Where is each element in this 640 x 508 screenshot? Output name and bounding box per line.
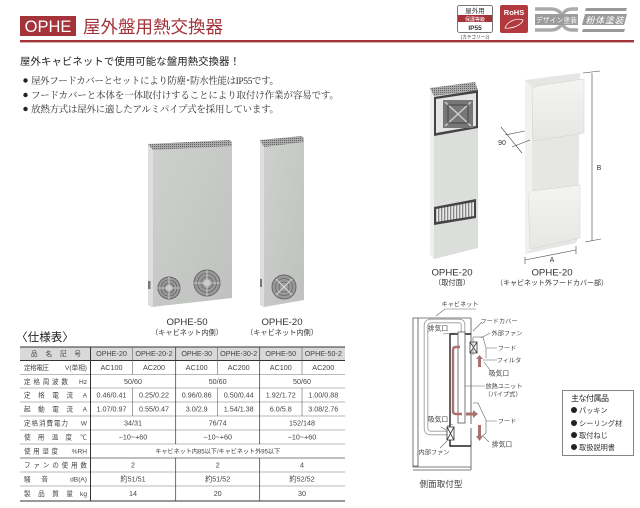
diagram labels — [419, 300, 523, 489]
header row: OPHE-50-2 — [305, 349, 342, 358]
heat pipe unit — [458, 332, 465, 423]
table data: 20 — [214, 489, 222, 498]
table data: 4 — [300, 460, 304, 470]
table heading: 〈仕様表〉 — [16, 330, 74, 344]
badge: RoHS: RoHS — [504, 8, 524, 17]
dimension labels: A — [550, 257, 555, 264]
table data: 1.00/0.88 — [308, 390, 338, 400]
caption: OPHE-50 — [151, 317, 223, 337]
upper hood — [532, 79, 584, 141]
table data: −10~+60 — [288, 432, 316, 442]
lower opening with grille — [434, 199, 476, 225]
caption: OPHE-50: OPHE-50 — [166, 317, 208, 328]
table data: AC100 — [186, 363, 208, 372]
accessories box — [562, 390, 634, 456]
badge: RoHS — [500, 5, 528, 33]
bullet 2: フードカバーと本体を一体取付けすることにより取付け作業が容易です。 — [31, 90, 339, 102]
accessories heading: 主な付属品 — [571, 393, 609, 403]
accessory items: 取付ねじ — [579, 431, 608, 440]
header row: 品名記号 — [31, 349, 81, 358]
row labels: A — [83, 406, 88, 414]
unit frame — [450, 334, 471, 446]
caption: OPHE-20 inside: （キャビネット内側） — [246, 328, 318, 337]
table data: 30 — [298, 489, 306, 498]
caption: OPHE-20 inside: OPHE-20 — [261, 317, 303, 328]
cabinet outline — [413, 318, 471, 470]
model tag: OPHE — [25, 18, 71, 36]
row labels: dB(A) — [70, 476, 87, 484]
internal air duct — [426, 321, 463, 433]
lower hood — [528, 185, 580, 249]
diagram labels: （パイプ式） — [484, 390, 522, 398]
side-mount diagram — [413, 300, 523, 489]
header row: OPHE-30 — [181, 349, 212, 358]
caption: mounting face: OPHE-20 — [431, 268, 473, 278]
row labels: 騒音 — [24, 474, 48, 484]
row labels: V(単相) — [65, 363, 87, 372]
accessory items: シーリング材 — [579, 419, 622, 428]
table data: 1.54/1.38 — [224, 404, 254, 414]
row labels: ファンの使用数 — [24, 460, 87, 470]
caption: hood part — [496, 268, 608, 287]
row labels: A — [83, 392, 88, 400]
badge: powder coating — [582, 8, 627, 32]
diagram labels: 吸気口 — [489, 368, 509, 378]
header row: OPHE-50 — [265, 349, 296, 358]
table data: 6.0/5.8 — [270, 404, 292, 414]
table data: AC100 — [101, 363, 122, 372]
product photo: mounting face — [430, 82, 478, 259]
fans — [447, 342, 477, 440]
table data: 2 — [216, 460, 220, 470]
row labels: kg — [80, 491, 87, 498]
diagram labels: 内部ファン — [419, 448, 449, 456]
badge: powder coating: 粉体塗装 — [586, 16, 625, 26]
table data: 0.55/0.47 — [139, 404, 169, 414]
diagram labels: フード — [498, 346, 516, 352]
table grid — [20, 347, 345, 501]
table data: 約51/51 — [120, 474, 146, 484]
caption: hood part: OPHE-20 — [531, 268, 573, 278]
caption: OPHE-50: （キャビネット内側） — [151, 328, 223, 337]
row labels: 起動電流 — [24, 404, 73, 414]
table data: AC100 — [270, 363, 292, 372]
caption: mounting face — [431, 268, 473, 287]
fan right — [194, 270, 220, 296]
row labels: 定格電流 — [24, 390, 73, 400]
badge: IP55: 保護等級 — [465, 16, 485, 23]
table data: 3.08/2.76 — [308, 404, 338, 414]
row labels: Hz — [79, 379, 87, 386]
table data: 50/60 — [124, 377, 142, 386]
row labels — [24, 363, 88, 498]
badge: design coating — [535, 9, 578, 30]
row labels: 使用湿度 — [24, 446, 58, 456]
header row: OPHE-20-2 — [135, 349, 173, 358]
table data: 50/60 — [209, 377, 227, 386]
title: 屋外盤用熱交換器 — [83, 17, 224, 37]
header rule — [20, 40, 634, 42]
dimension lines — [501, 71, 601, 264]
caption: mounting face: （取付面） — [434, 278, 470, 287]
diagram labels: フード — [498, 418, 516, 426]
table data: 0.96/0.86 — [182, 390, 212, 400]
row labels: ℃ — [80, 434, 87, 442]
table data: 0.25/0.22 — [139, 390, 169, 400]
table data: 約52/52 — [289, 474, 315, 484]
dimension labels — [498, 140, 602, 264]
diagram labels: フィルタ — [497, 356, 521, 364]
row labels: 使用温度 — [24, 432, 72, 442]
leader lines — [436, 309, 497, 448]
badge: IP55: IP55 — [468, 25, 482, 32]
diagram labels: キャビネット — [441, 300, 479, 308]
table data: −10~+60 — [203, 432, 232, 442]
row labels: 定格周波数 — [24, 377, 68, 386]
diagram labels: 排気口 — [428, 324, 448, 332]
table data: 76/74 — [209, 418, 227, 428]
diagram labels: 排気口 — [492, 440, 512, 448]
table data: 14 — [129, 489, 137, 498]
specification table — [20, 347, 345, 501]
header row: OPHE-30-2 — [220, 349, 257, 358]
airflow path with arrow — [453, 347, 483, 441]
badge: IP55 — [458, 6, 492, 40]
diagram labels: 外部ファン — [492, 330, 522, 338]
badge: design coating: デザイン塗装 — [536, 16, 577, 24]
subheading: 屋外キャビネットで使用可能な盤用熱交換器！ — [20, 55, 240, 68]
badge: IP55: 屋外用 — [465, 6, 485, 15]
table data: AC200 — [312, 363, 334, 372]
table data: 0.46/0.41 — [97, 390, 126, 400]
product photo: hood cover with dimensions — [498, 71, 602, 264]
table data: AC200 — [228, 363, 250, 372]
table data — [97, 363, 338, 498]
diagram labels: 側面取付型 — [420, 478, 463, 489]
certification badges — [458, 5, 627, 40]
table data: 0.50/0.44 — [224, 390, 254, 400]
table data: 1.07/0.97 — [97, 404, 126, 414]
accessory items — [571, 406, 622, 452]
diagram labels: フードカバー — [480, 318, 518, 326]
product photo: OPHE-20 — [260, 136, 304, 307]
dimension labels: B — [597, 165, 602, 172]
diagram labels: 吸気口 — [428, 414, 448, 424]
header row: OPHE-20 — [96, 349, 127, 358]
table data: 50/60 — [293, 377, 311, 386]
table data: −10~+60 — [119, 432, 147, 442]
bullet 1: 屋外フードカバーとセットにより防塵･防水性能はIP55です。 — [31, 75, 279, 87]
feature list — [23, 75, 339, 116]
product photo: OPHE-50 — [148, 140, 232, 307]
table data: 約51/52 — [205, 474, 230, 484]
header row — [20, 347, 345, 360]
table data: 3.0/2.9 — [186, 404, 208, 414]
table data: 2 — [131, 460, 135, 470]
row labels: 定格電圧 — [24, 363, 49, 372]
table data: キャビネット内85以下/キャビネット外95以下 — [155, 448, 280, 456]
caption: OPHE-20 inside — [246, 317, 318, 337]
fan left — [158, 277, 180, 299]
table data: AC200 — [143, 363, 165, 372]
row labels: %RH — [72, 448, 87, 456]
row labels: 定格消費電力 — [24, 418, 68, 428]
row labels: 製品質量 — [24, 489, 73, 498]
caption: hood part: （キャビネット外フードカバー部） — [496, 278, 608, 287]
badge: IP55: (カテゴリー2) — [461, 34, 490, 40]
fan — [272, 275, 296, 299]
accessory items: パッキン — [579, 406, 608, 415]
table data: 152/148 — [289, 418, 315, 428]
accessory items: 取扱説明書 — [579, 443, 615, 452]
dimension labels: 90 — [498, 140, 506, 147]
table data: 34/31 — [124, 418, 142, 428]
table data: 1.92/1.72 — [266, 390, 296, 400]
bullet 3: 放熱方式は屋外に適したアルミパイプ式を採用しています。 — [31, 104, 279, 116]
row labels: W — [81, 420, 88, 428]
upper opening with fan — [434, 90, 478, 136]
hoods — [473, 337, 486, 437]
title banner — [20, 16, 224, 37]
diagram labels: 放熱ユニット — [485, 382, 523, 390]
